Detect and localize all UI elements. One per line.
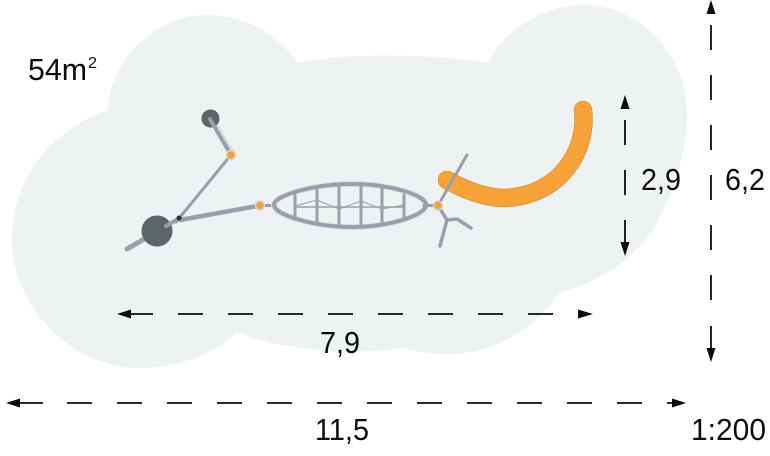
dimension: width 11,5	[6, 398, 686, 447]
scale label: 1:200	[691, 412, 766, 447]
dimension: width 7,9	[117, 310, 593, 360]
equipment: arm to small post	[176, 110, 236, 222]
equipment: net bridge	[274, 184, 426, 227]
area label: 2	[88, 55, 97, 72]
dimension: width 11,5: 11,5	[315, 412, 369, 447]
equipment: curved orange slide tube	[447, 110, 584, 198]
safety area blob	[12, 5, 687, 368]
dimension: height 2,9: 2,9	[641, 162, 681, 197]
dimension: height 6,2: 6,2	[725, 162, 765, 197]
area label: 54m	[28, 52, 87, 87]
dimension: width 7,9: 7,9	[320, 325, 360, 360]
equipment: large post and beam	[127, 201, 276, 249]
dimension: height 6,2	[706, 0, 765, 362]
dimension: height 2,9	[620, 95, 681, 256]
equipment: right connector and fork	[424, 155, 471, 246]
